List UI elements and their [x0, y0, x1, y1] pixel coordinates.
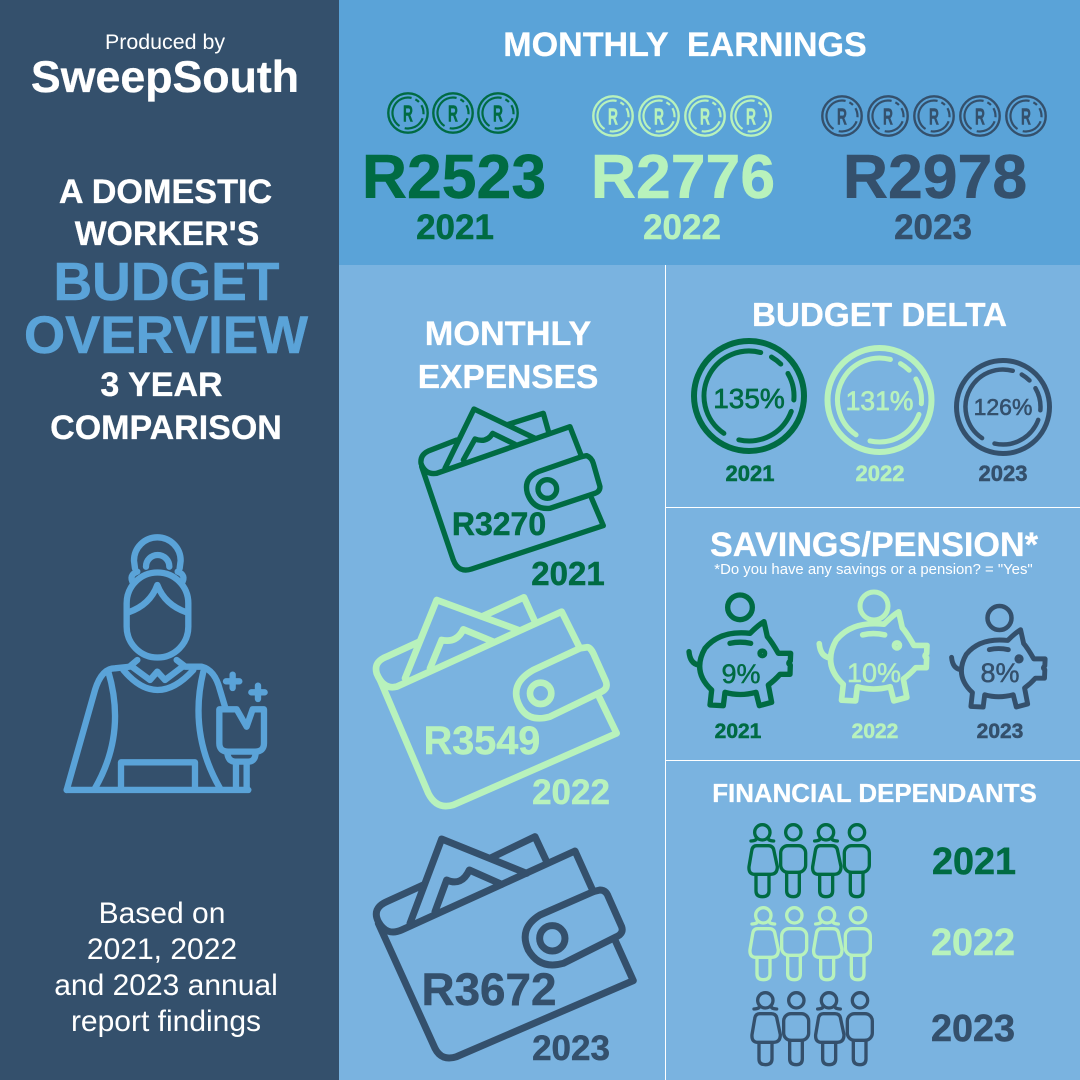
- ring 2021: 135%: [713, 383, 785, 414]
- panel: monthly expenses: [376, 315, 633, 1068]
- piggy bank 2022: [819, 592, 927, 743]
- panel: lower content background: [339, 265, 1080, 1080]
- icon: coins 2023: R: [929, 105, 939, 130]
- title: 3 YEAR: [100, 366, 223, 404]
- value: 2023 expenses: R3672: [422, 964, 556, 1015]
- icon: coins 2022: [592, 95, 772, 137]
- icon: coins 2022: R: [746, 105, 756, 130]
- panel: financial dependants: [712, 780, 1037, 1065]
- icon: coins 2021: R: [448, 102, 458, 127]
- icon: domestic worker: [67, 537, 265, 790]
- title: COMPARISON: [50, 409, 282, 447]
- panel: budget delta: [688, 297, 1054, 486]
- icon: coins 2022: R: [700, 105, 710, 130]
- earnings 2021: R2523: [362, 142, 546, 212]
- heading: financial dependants: FINANCIAL DEPENDANTS: [712, 780, 1037, 808]
- earnings 2022: R2776: [591, 142, 775, 212]
- earnings 2022: 2022: [643, 208, 721, 247]
- people row 2022: [750, 908, 870, 980]
- year: 2021 expenses: 2021: [531, 555, 605, 592]
- title: [24, 173, 308, 447]
- ring 2022: 2022: [856, 461, 904, 486]
- icon: coins 2023: R: [837, 105, 847, 130]
- icon: coins 2022: R: [608, 105, 618, 130]
- earnings 2021: [362, 92, 546, 247]
- year: dependants 2021: 2021: [932, 841, 1016, 883]
- title: BUDGET: [54, 253, 280, 312]
- piggy bank 2022: 2022: [852, 720, 898, 743]
- piggy bank 2022: 10%: [847, 658, 901, 688]
- icon: coins 2023: R: [1021, 105, 1031, 130]
- icon: coins 2023: R: [883, 105, 893, 130]
- value: 2021 expenses: R3270: [452, 506, 546, 542]
- year: dependants 2023: 2023: [931, 1008, 1015, 1050]
- earnings 2023: R2978: [843, 142, 1027, 212]
- heading: budget delta: BUDGET DELTA: [752, 297, 1007, 334]
- piggy bank 2023: 8%: [980, 658, 1020, 688]
- source note: and 2023 annual: [54, 969, 278, 1002]
- source note: 2021, 2022: [87, 933, 237, 966]
- heading: savings/pension: SAVINGS/PENSION*: [710, 526, 1039, 564]
- icon: coins 2021: R: [403, 102, 413, 127]
- ring 2022: 131%: [846, 386, 913, 416]
- producer credit: [31, 30, 299, 102]
- icon: wallet 2021: [421, 409, 603, 570]
- heading: monthly expenses: EXPENSES: [418, 359, 598, 396]
- producer credit: SweepSouth: [31, 53, 299, 102]
- ring 2023: 126%: [974, 394, 1032, 420]
- piggy bank 2021: [689, 595, 791, 743]
- source note: [54, 897, 278, 1038]
- piggy bank 2021: 2021: [715, 720, 762, 743]
- heading: monthly earnings: MONTHLY EARNINGS: [503, 26, 867, 64]
- source note: Based on: [99, 897, 225, 930]
- heading: monthly expenses: MONTHLY: [425, 315, 591, 353]
- piggy bank 2021: 9%: [721, 659, 761, 689]
- footnote: survey question: *Do you have any savings or a pension? = "Yes": [714, 562, 1033, 578]
- people row 2023: [752, 993, 872, 1065]
- ring 2021: 2021: [726, 461, 774, 486]
- panel: monthly earnings: [339, 0, 1080, 265]
- earnings 2023: [821, 95, 1047, 247]
- year: 2023 expenses: 2023: [532, 1029, 610, 1068]
- earnings 2021: 2021: [416, 208, 494, 247]
- year: 2022 expenses: 2022: [532, 773, 610, 812]
- people row 2021: [749, 825, 869, 897]
- value: 2022 expenses: R3549: [424, 719, 540, 763]
- panel: savings and pension: [689, 526, 1045, 743]
- ring 2023: [952, 356, 1054, 486]
- producer credit: Produced by: [105, 30, 225, 54]
- ring 2022: [822, 343, 937, 486]
- icon: wallet 2023: [376, 837, 633, 1058]
- icon: coins 2023: R: [975, 105, 985, 130]
- piggy bank 2023: [952, 606, 1045, 743]
- piggy bank 2023: 2023: [977, 720, 1023, 743]
- title: OVERVIEW: [24, 306, 308, 365]
- year: dependants 2022: 2022: [931, 922, 1015, 964]
- earnings 2023: 2023: [894, 208, 972, 247]
- title: WORKER'S: [75, 215, 259, 253]
- icon: coins 2022: R: [654, 105, 664, 130]
- icon: coins 2021: R: [493, 102, 503, 127]
- icon: wallet 2022: [376, 597, 617, 806]
- heading: monthly expenses: [418, 315, 598, 396]
- ring 2023: 2023: [979, 461, 1027, 486]
- icon: coins 2021: [387, 92, 519, 134]
- title: A DOMESTIC: [59, 173, 272, 211]
- earnings 2022: [591, 95, 775, 247]
- ring 2021: [688, 335, 810, 486]
- icon: coins 2023: [821, 95, 1047, 137]
- panel: left sidebar: [0, 0, 339, 1080]
- source note: report findings: [71, 1005, 261, 1038]
